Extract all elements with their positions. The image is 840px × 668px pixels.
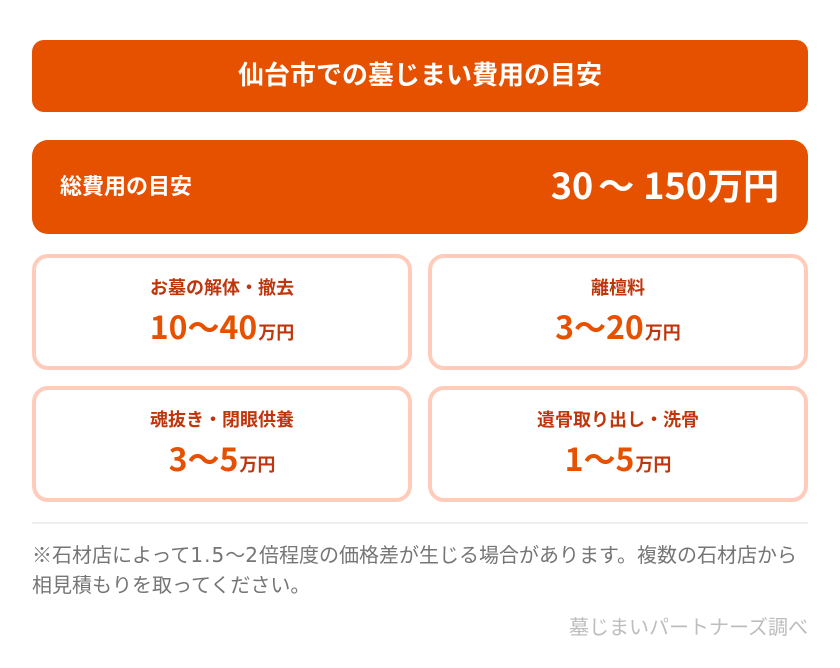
title banner [32, 40, 808, 112]
card: grave demolition [32, 254, 412, 370]
card label: 遺骨取り出し・洗骨 [537, 406, 699, 432]
card value: 3〜20万円 [555, 303, 681, 349]
panel: total cost [32, 140, 808, 234]
card: remains removal and washing [428, 386, 808, 502]
card: temple leaving fee [428, 254, 808, 370]
footnote text: 相見積もりを取ってください。 [32, 569, 310, 598]
card: soul removal service [32, 386, 412, 502]
total cost value: 30〜150万円 [551, 158, 779, 210]
card label: 離檀料 [591, 274, 645, 300]
card label: 魂抜き・閉眼供養 [150, 406, 294, 432]
total cost label: 総費用の目安 [60, 169, 192, 201]
card value: 10〜40万円 [150, 303, 294, 349]
footnote text: ※石材店によって1.5〜2倍程度の価格差が生じる場合があります。複数の石材店から [32, 539, 797, 568]
card value: 3〜5万円 [169, 435, 275, 481]
title banner: 仙台市での墓じまい費用の目安 [238, 55, 602, 92]
card value: 1〜5万円 [565, 435, 671, 481]
source credit: 墓じまいパートナーズ調べ [569, 611, 808, 640]
footnote text [32, 539, 797, 598]
card label: お墓の解体・撤去 [150, 274, 294, 300]
